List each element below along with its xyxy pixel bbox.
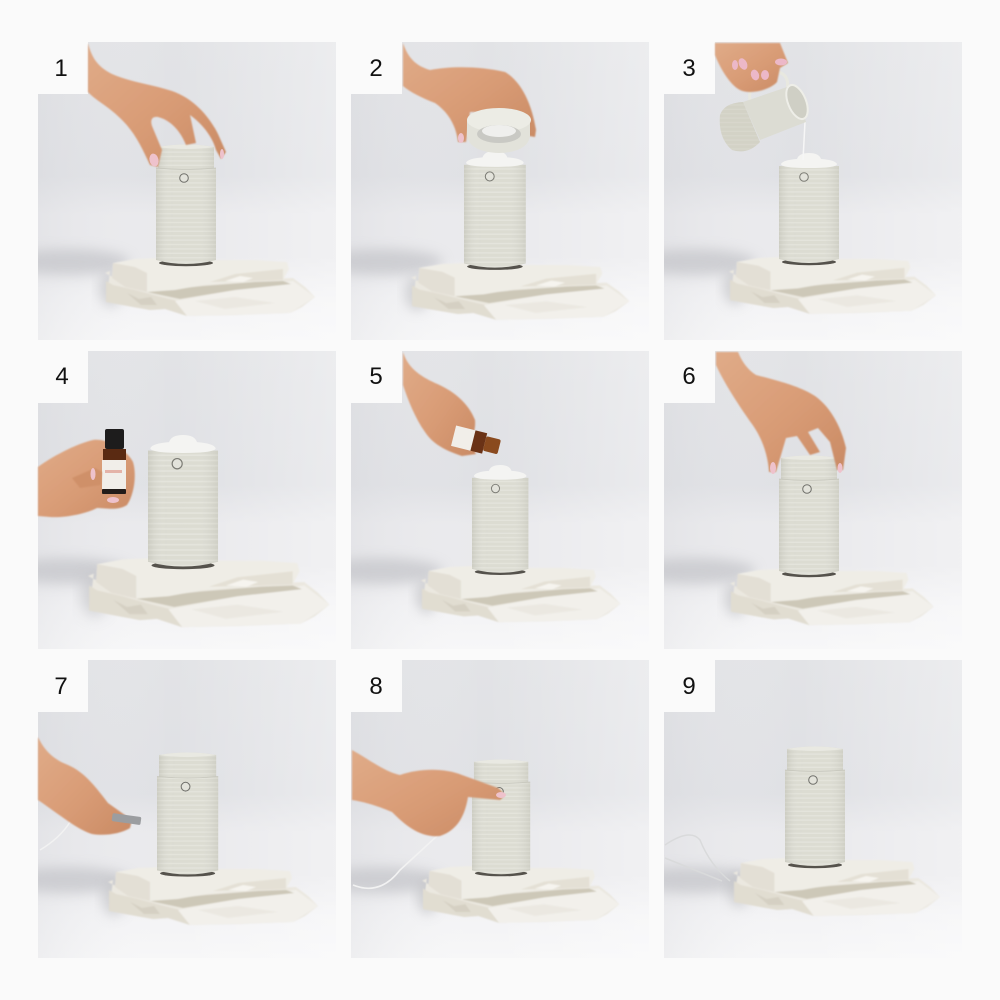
panel: step 2, lid removed [319,42,649,340]
panel 2 removed lid [458,108,531,153]
panel 3 water stream [803,122,805,160]
panel 2 backdrop [319,42,649,340]
panel 4 hand [38,440,135,517]
panel 1 number tab: 1 [54,55,68,82]
panel: step 7, plug in [6,660,336,958]
panel: step 4, show oil bottle [6,351,336,649]
panel: step 1, hand lifts lid [6,42,336,340]
panel 9 diffuser [785,746,845,868]
panel: step 9, running diffuser [632,660,962,958]
panel 3 number tab: 3 [682,55,696,82]
panel 2 number tab [351,42,402,94]
panel 4 oil bottle [102,429,126,494]
panel 8 number tab [351,660,402,712]
panel 9 number tab [664,660,715,712]
panel 5 diffuser [472,465,528,575]
panel 5 number tab [351,351,402,403]
panel 5 stone base [415,566,620,622]
panel 4 thumb [72,468,119,503]
panel 4 stone base [81,558,329,627]
panel 1 hand [88,43,226,167]
panel 6 number tab: 6 [682,363,696,390]
panel 6 hand [716,352,846,474]
panel 3 pitcher [720,72,812,151]
panel 7 stone base [102,867,318,925]
panel 3 number tab [664,42,715,94]
panel 9 stone base [727,858,940,916]
panel 7 power cable [40,815,92,850]
panel 4 diffuser [148,435,218,569]
panel 8 number tab: 8 [369,673,383,700]
panel 4 backdrop [6,351,336,649]
panel: step 5, add oil drops [319,351,649,649]
panel 1 backdrop [6,42,336,340]
panel 5 hand [403,352,476,456]
panel: step 6, replace lid [632,351,962,649]
panel 6 diffuser [779,456,839,577]
panel 5 number tab: 5 [369,363,383,390]
panel 4 number tab [38,351,88,403]
panel 3 hand [715,43,788,92]
panel 7 backdrop [6,660,336,958]
panel 3 stone base [723,257,936,314]
panel 9 number tab: 9 [682,673,696,700]
panel 8 power cable [353,836,437,888]
panel 6 backdrop [632,351,962,649]
panel 7 number tab [38,660,88,712]
panel 1 stone base [99,258,315,316]
panel 8 hand [352,750,506,836]
panel 8 backdrop [319,660,649,958]
panel 5 oil bottle [451,425,502,457]
panel 2 stone base [405,263,629,320]
panel 2 hand [403,43,536,142]
panel 7 number tab: 7 [54,673,68,700]
panel 8 diffuser [472,759,530,876]
panel 9 backdrop [632,660,962,958]
panel 2 diffuser [464,151,526,270]
panel: step 3, pour water [632,42,962,340]
panel 7 plug [112,813,141,825]
panel 1 number tab [38,42,88,94]
panel 8 stone base [416,866,619,923]
panel 6 stone base [724,569,934,625]
panel: step 8, press button [319,660,649,958]
panel 6 number tab [664,351,715,403]
panel 3 backdrop [632,42,962,340]
panel 9 power cable [665,835,730,881]
panel 7 diffuser [157,753,218,877]
panel 4 number tab: 4 [55,363,69,390]
panel 2 number tab: 2 [369,55,383,82]
panel 3 diffuser [779,153,839,265]
panel 7 hand [38,737,132,835]
panel 1 diffuser [156,144,216,266]
panel 5 backdrop [319,351,649,649]
